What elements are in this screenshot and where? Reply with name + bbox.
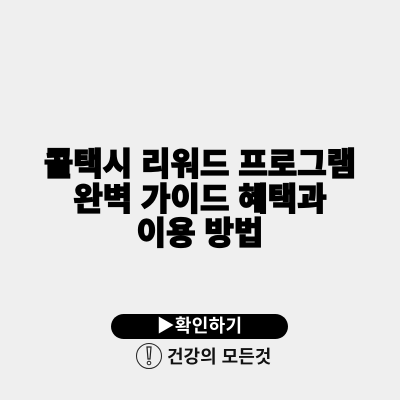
title: [44, 146, 356, 251]
brand label: 건강의 모든것: [167, 347, 271, 367]
button: confirm: ▶확인하기: [157, 316, 242, 336]
title: 완벽 가이드 혜택과: [73, 181, 327, 217]
icon: exclamation circle: [136, 343, 162, 369]
title: 콜택시 리워드 프로그램: [44, 146, 356, 182]
title: 이용 방법: [137, 215, 263, 251]
button: confirm: [111, 314, 288, 339]
